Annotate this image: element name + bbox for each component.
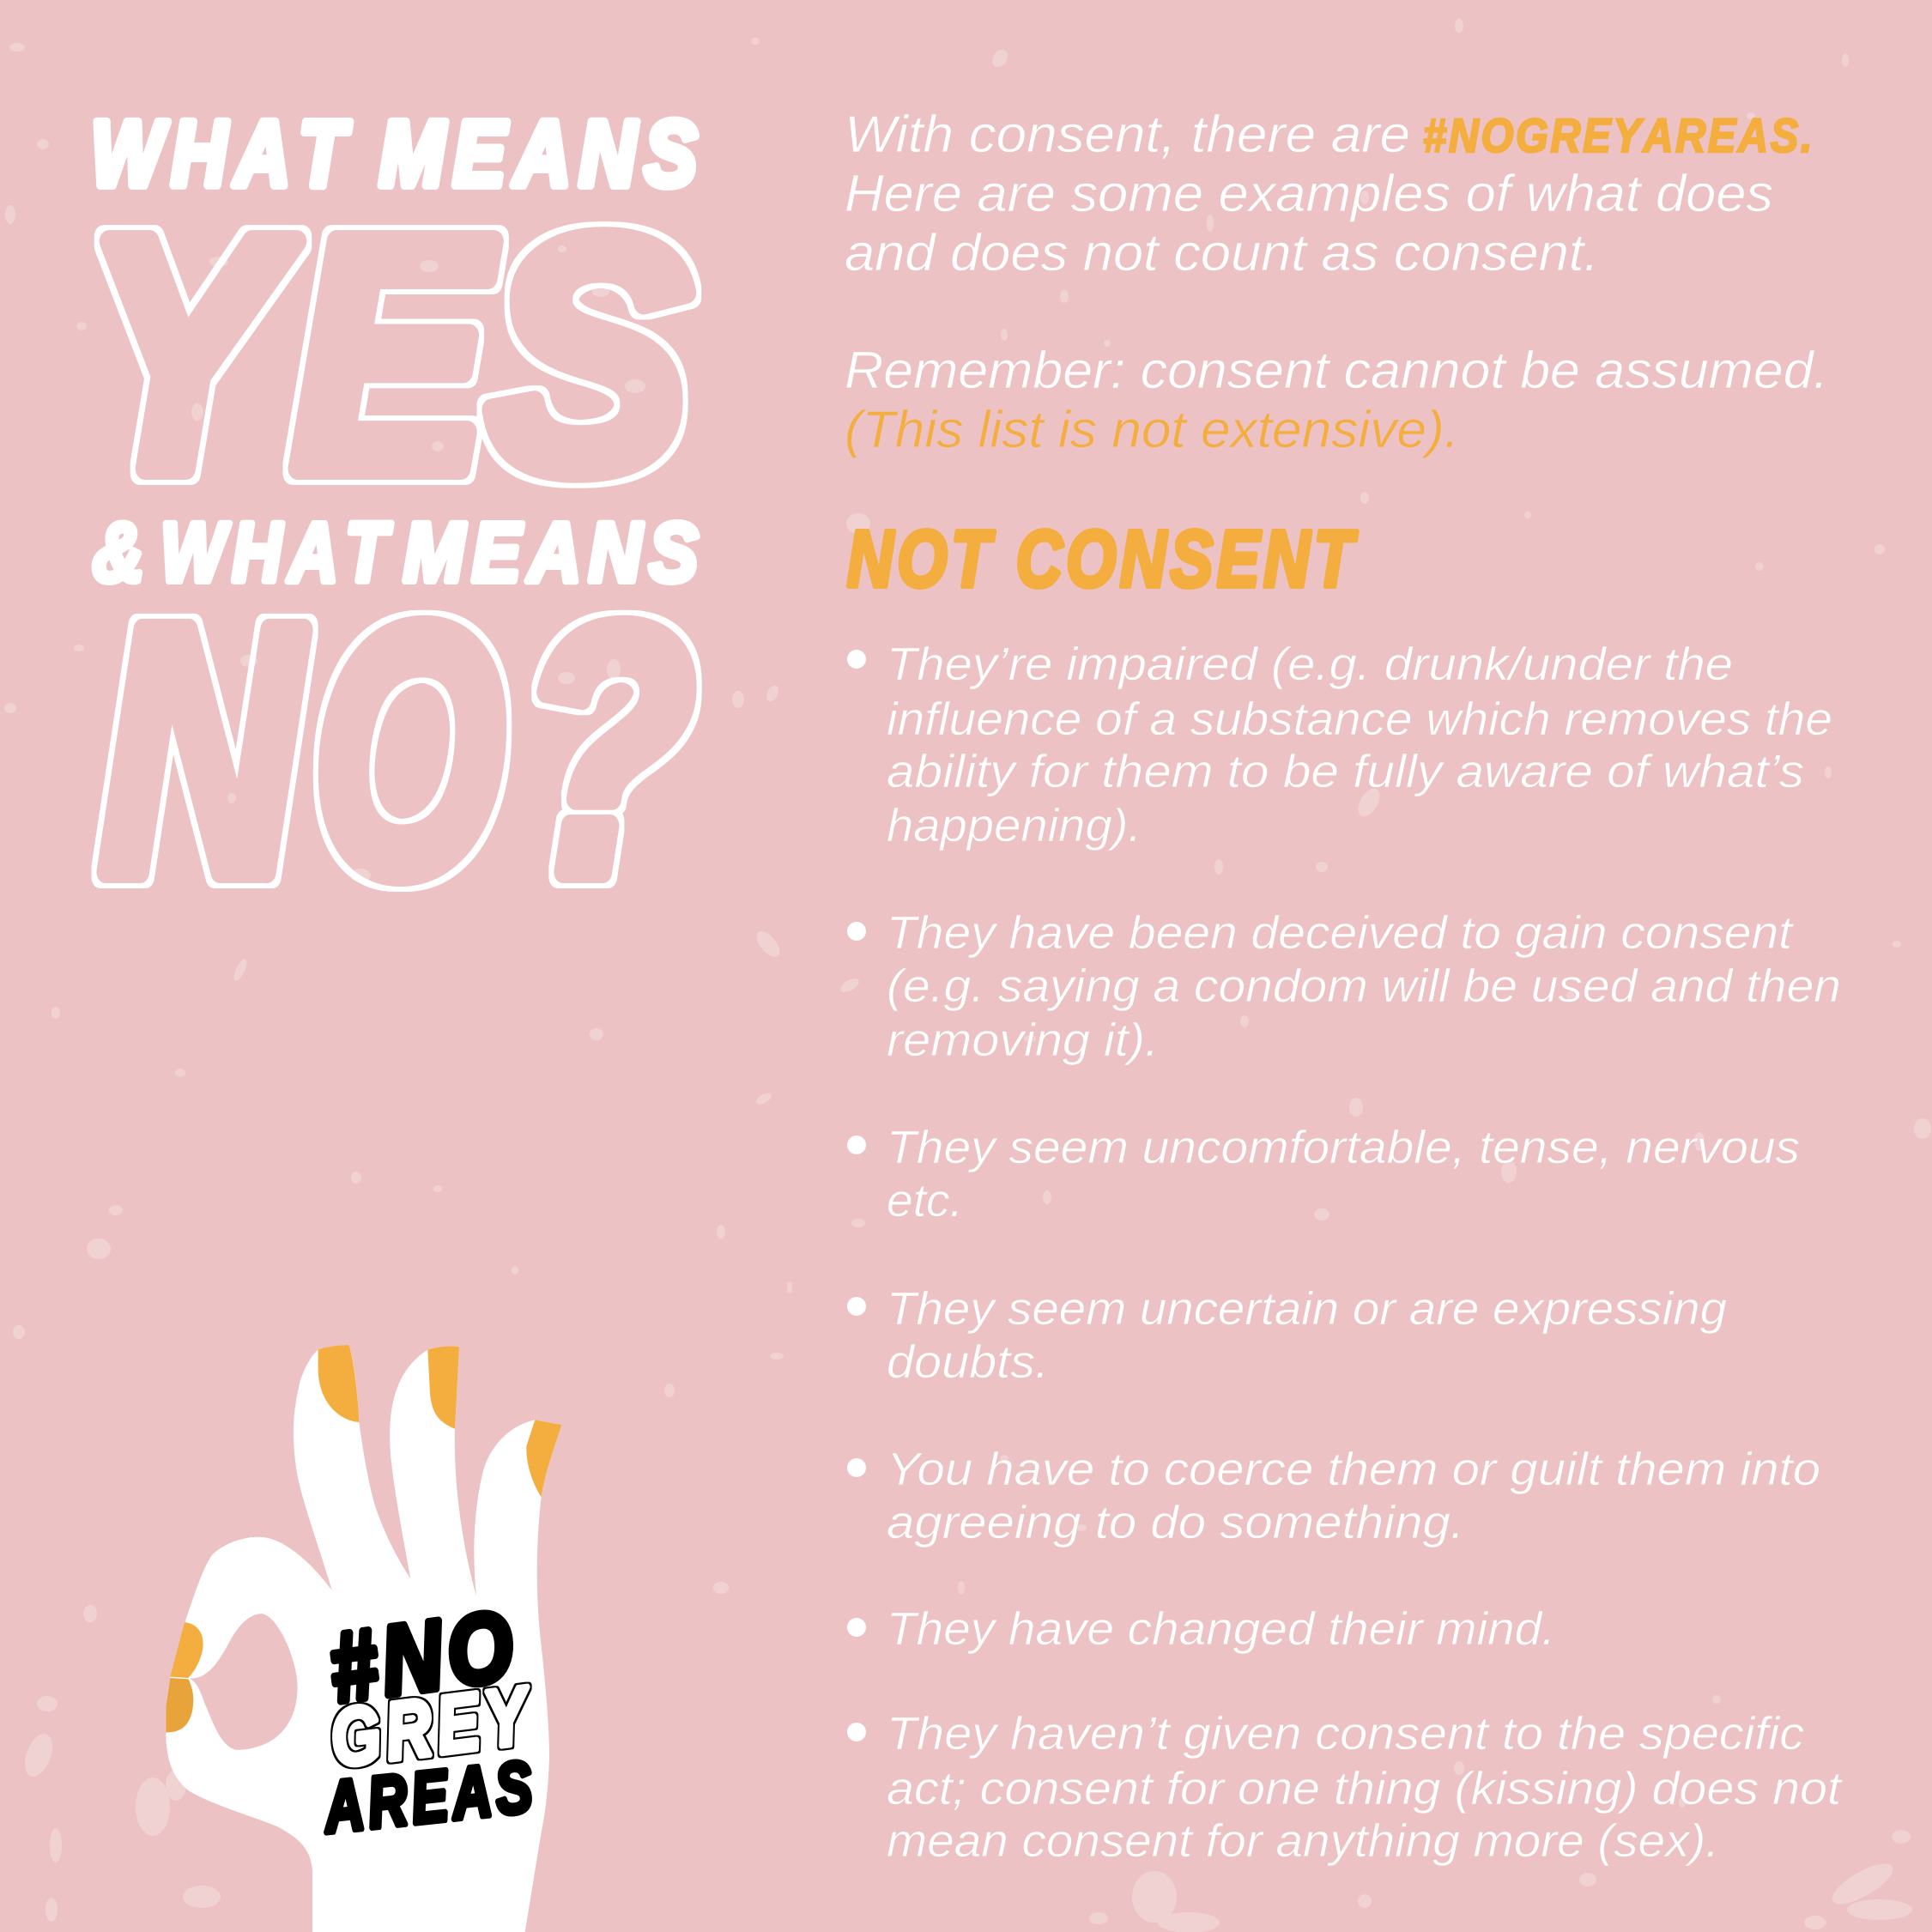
nails (166, 1345, 561, 1732)
heading line: WHAT MEANS: WHAT (91, 101, 354, 205)
item 3: uncomfortable: etc. (887, 1175, 963, 1226)
item 1: impaired: ability for them to be fully aware of what’s (887, 746, 1804, 797)
item 2: deceived: (e.g. saying a condom will be used and then (887, 960, 1841, 1012)
logo line: GREY: GREY (326, 1669, 538, 1784)
heading line: and what means: WHAT (160, 506, 394, 599)
outlined word: NO?: N (100, 554, 307, 947)
icon: OK hand sign with orange nails (166, 1345, 561, 1932)
item 2: deceived: removing it). (887, 1014, 1159, 1066)
heading line: and what means: MEANS (403, 506, 706, 599)
intro line 3: and does not count as consent. (845, 224, 1599, 282)
item 1: impaired: happening). (887, 800, 1142, 851)
item 3: uncomfortable (847, 1122, 1800, 1226)
reminder line: Remember: consent cannot be assumed. (845, 342, 1828, 399)
outlined word: NO?: ? (520, 554, 693, 947)
item 7: specific act: act; consent for one thing (kissing) does not (887, 1763, 1843, 1814)
item 3: uncomfortable: They seem uncomfortable, tense, nervous (887, 1122, 1800, 1173)
item 6: changed mind: They have changed their mind. (887, 1603, 1555, 1655)
hand silhouette (166, 1345, 561, 1932)
intro line 2: Here are some examples of what does (845, 165, 1773, 222)
item 7: specific act (847, 1708, 1843, 1867)
logo line: #NO: #NO (324, 1590, 524, 1723)
list: not consent items (847, 639, 1843, 1867)
finger loop opening (190, 1614, 298, 1750)
item 4: uncertain (847, 1283, 1727, 1388)
reminder note: (This list is not extensive). (845, 401, 1459, 458)
title: what means yes and what means no (85, 101, 706, 947)
outlined word: YES: E (293, 169, 497, 539)
heading line: and what means (93, 506, 706, 599)
item 2: deceived (847, 907, 1841, 1066)
heading: not consent: NOT CONSENT (847, 514, 1358, 603)
item 5: coercion: You have to coerce them or guilt them into (887, 1444, 1820, 1495)
item 5: coercion: agreeing to do something. (887, 1497, 1464, 1548)
logo line: AREAS: AREAS (319, 1745, 541, 1848)
item 1: impaired: influence of a substance which removes the (887, 693, 1832, 745)
item 1: impaired: They’re impaired (e.g. drunk/under the (887, 639, 1733, 690)
item 5: coercion (847, 1444, 1820, 1548)
item 2: deceived: They have been deceived to gain consent (887, 907, 1794, 959)
item 7: specific act: mean consent for anything more (sex). (887, 1815, 1719, 1867)
outlined word: NO? (100, 554, 693, 947)
outlined word: YES: S (488, 169, 691, 539)
intro line 1: With consent, there are (845, 106, 1410, 163)
heading line: and what means: & (93, 506, 144, 599)
item 7: specific act: They haven’t given consent to the specific (887, 1708, 1804, 1759)
outlined word: YES: Y (85, 169, 300, 539)
outlined word: YES (85, 169, 691, 539)
hand logo: no grey areas (319, 1590, 541, 1848)
item 4: uncertain: doubts. (887, 1336, 1049, 1388)
outlined word: NO?: O (314, 554, 503, 947)
heading line: WHAT MEANS: MEANS (379, 101, 706, 205)
intro text block (845, 106, 1828, 458)
heading line: WHAT MEANS (91, 101, 706, 205)
item 4: uncertain: They seem uncertain or are expressing (887, 1283, 1727, 1335)
hashtag highlight: #NOGREYAREAS. (1423, 108, 1814, 162)
item 1: impaired (847, 639, 1832, 851)
